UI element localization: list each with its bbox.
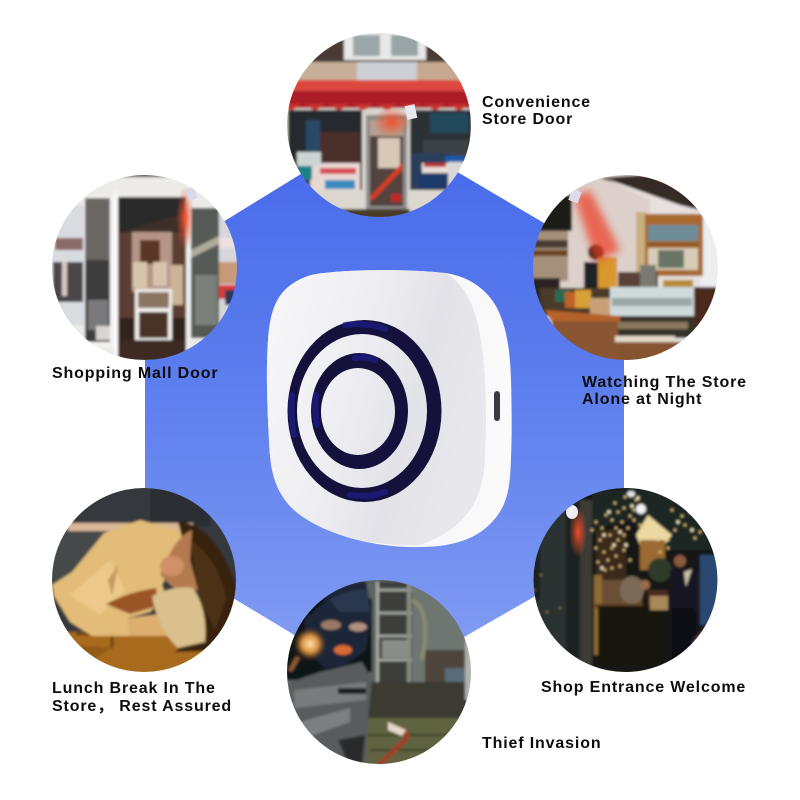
label: convenience store door: Store Door xyxy=(482,111,573,128)
shop windows xyxy=(288,110,362,190)
sensor xyxy=(405,104,417,120)
balaclava xyxy=(305,581,371,668)
door xyxy=(366,115,407,211)
flashlight xyxy=(293,627,327,661)
canopy dark green xyxy=(592,490,722,550)
panel: watching the store at night photo xyxy=(530,172,720,363)
plants and floor xyxy=(365,682,471,718)
left posters xyxy=(310,163,360,190)
face xyxy=(160,530,198,592)
mouth xyxy=(334,645,352,655)
label: thief invasion: Thief Invasion xyxy=(482,735,601,752)
pillow sleeve xyxy=(152,587,206,648)
usb port xyxy=(494,391,500,421)
panel: shop entrance welcome photo xyxy=(530,486,722,676)
sensor xyxy=(568,189,582,203)
window frame shelves xyxy=(376,582,412,682)
brick wall xyxy=(310,40,448,64)
blue hexagon backdrop xyxy=(145,126,624,686)
upper windows xyxy=(344,30,426,60)
blue street xyxy=(700,555,722,625)
wood counter xyxy=(545,310,620,322)
panel: shopping mall door photo xyxy=(50,172,241,363)
blurred lamp strip xyxy=(68,523,193,531)
panel: lunch break rest photo xyxy=(50,486,240,677)
red sensor glow xyxy=(569,506,587,558)
awning xyxy=(285,80,475,92)
crowbar xyxy=(378,728,407,766)
door red stripe xyxy=(370,163,402,201)
table and tables below xyxy=(595,604,643,608)
outer ring xyxy=(287,320,442,502)
yellow sweater xyxy=(52,520,190,636)
dark shadow around neck and arm xyxy=(285,590,340,680)
red sensor beam xyxy=(574,190,620,262)
eyes xyxy=(321,620,341,630)
warm tent xyxy=(636,515,672,545)
clothes xyxy=(133,262,147,288)
pavement xyxy=(285,190,366,220)
inner ring xyxy=(311,353,408,469)
wood shelving with fairy lights xyxy=(636,212,646,274)
warm interior xyxy=(594,575,602,655)
left shelves xyxy=(530,231,568,281)
panel: convenience store door photo xyxy=(285,30,477,220)
label: watching the store alone at night: Alone at Night xyxy=(582,391,702,408)
label: convenience store door: Convenience xyxy=(482,94,591,111)
floor xyxy=(119,317,135,341)
blue led highlights xyxy=(291,324,385,496)
device: white motion sensor chime xyxy=(267,270,512,547)
glass display xyxy=(610,287,696,317)
blackboard xyxy=(540,194,574,233)
label: lunch break in the store: Store， Rest Assured xyxy=(52,698,232,715)
hair xyxy=(175,522,238,652)
left glass door xyxy=(88,196,113,346)
hands and arms xyxy=(106,588,158,614)
device body xyxy=(267,270,512,547)
label: watching the store alone at night: Watching The Store xyxy=(582,374,747,391)
manila paper xyxy=(598,257,617,289)
red sensor beam xyxy=(176,188,194,248)
white lanterns xyxy=(636,504,646,514)
right posters xyxy=(410,153,450,189)
standing man xyxy=(670,570,698,610)
seated people xyxy=(620,576,644,604)
label: shop entrance welcome: Shop Entrance Welcome xyxy=(541,679,746,696)
device face shading xyxy=(267,270,486,545)
door frames xyxy=(114,192,118,356)
person xyxy=(588,244,604,260)
far right signs xyxy=(218,215,237,323)
bushes xyxy=(596,530,626,580)
white display case xyxy=(135,289,172,341)
far left street xyxy=(50,205,84,325)
panel: thief invasion photo xyxy=(285,578,475,768)
sensor xyxy=(186,188,198,201)
right glass xyxy=(191,208,219,338)
jacket xyxy=(290,662,372,768)
label: lunch break in the store: Lunch Break In The xyxy=(52,680,216,697)
label: shopping mall door: Shopping Mall Door xyxy=(52,365,218,382)
doorway interior xyxy=(118,197,186,359)
sensor xyxy=(566,505,578,519)
items on counter xyxy=(618,272,658,290)
gold fairy lights xyxy=(592,497,705,570)
table xyxy=(67,630,204,672)
goods left xyxy=(540,288,610,316)
red sensor beam xyxy=(374,108,410,136)
tan fascia xyxy=(285,62,357,81)
left wall xyxy=(530,500,585,675)
